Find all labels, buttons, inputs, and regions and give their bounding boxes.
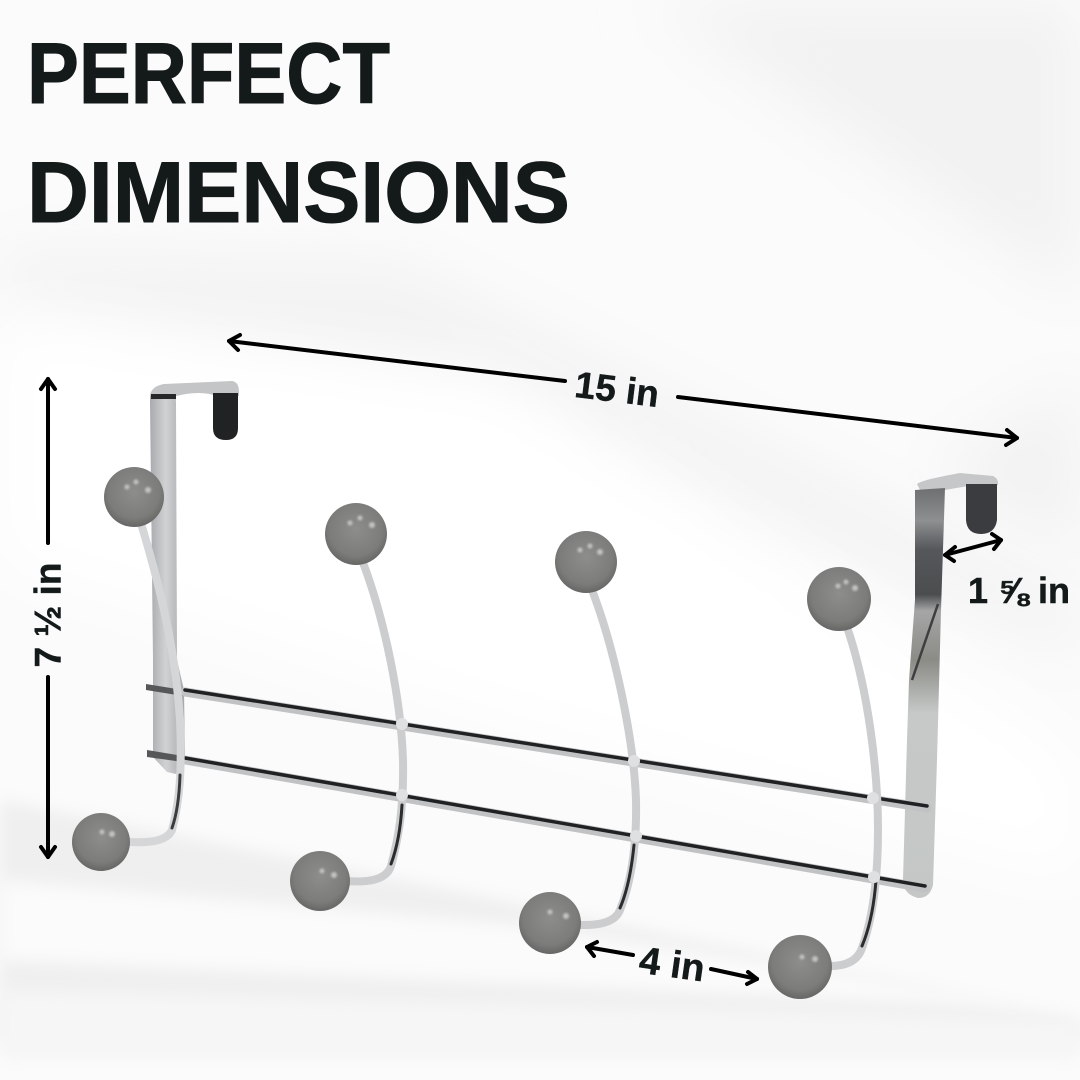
product: over-door hook rack — [72, 381, 998, 999]
dimension: height 7 1/2 in: 7 ½ in — [28, 563, 68, 667]
grey ball tips — [72, 467, 871, 999]
dimension: depth 1 5/8 in: 1 ⅝ in — [968, 570, 1070, 611]
dimension: width 15 in: 15 in — [573, 364, 661, 415]
title: DIMENSIONS — [27, 145, 570, 241]
dimension: depth 1 5/8 in — [945, 534, 1070, 611]
dimension: height 7 1/2 in — [28, 379, 68, 857]
hook stems — [130, 520, 878, 966]
title: PERFECT — [27, 26, 390, 122]
dimension: hook spacing 4 in — [587, 940, 757, 990]
dimension: hook spacing 4 in: 4 in — [637, 940, 707, 990]
rail joints — [396, 718, 880, 883]
title — [27, 26, 570, 241]
dimension: width 15 in — [229, 335, 1017, 445]
left door bracket — [146, 381, 239, 774]
horizontal rails — [185, 690, 927, 888]
right door bracket — [903, 473, 998, 898]
